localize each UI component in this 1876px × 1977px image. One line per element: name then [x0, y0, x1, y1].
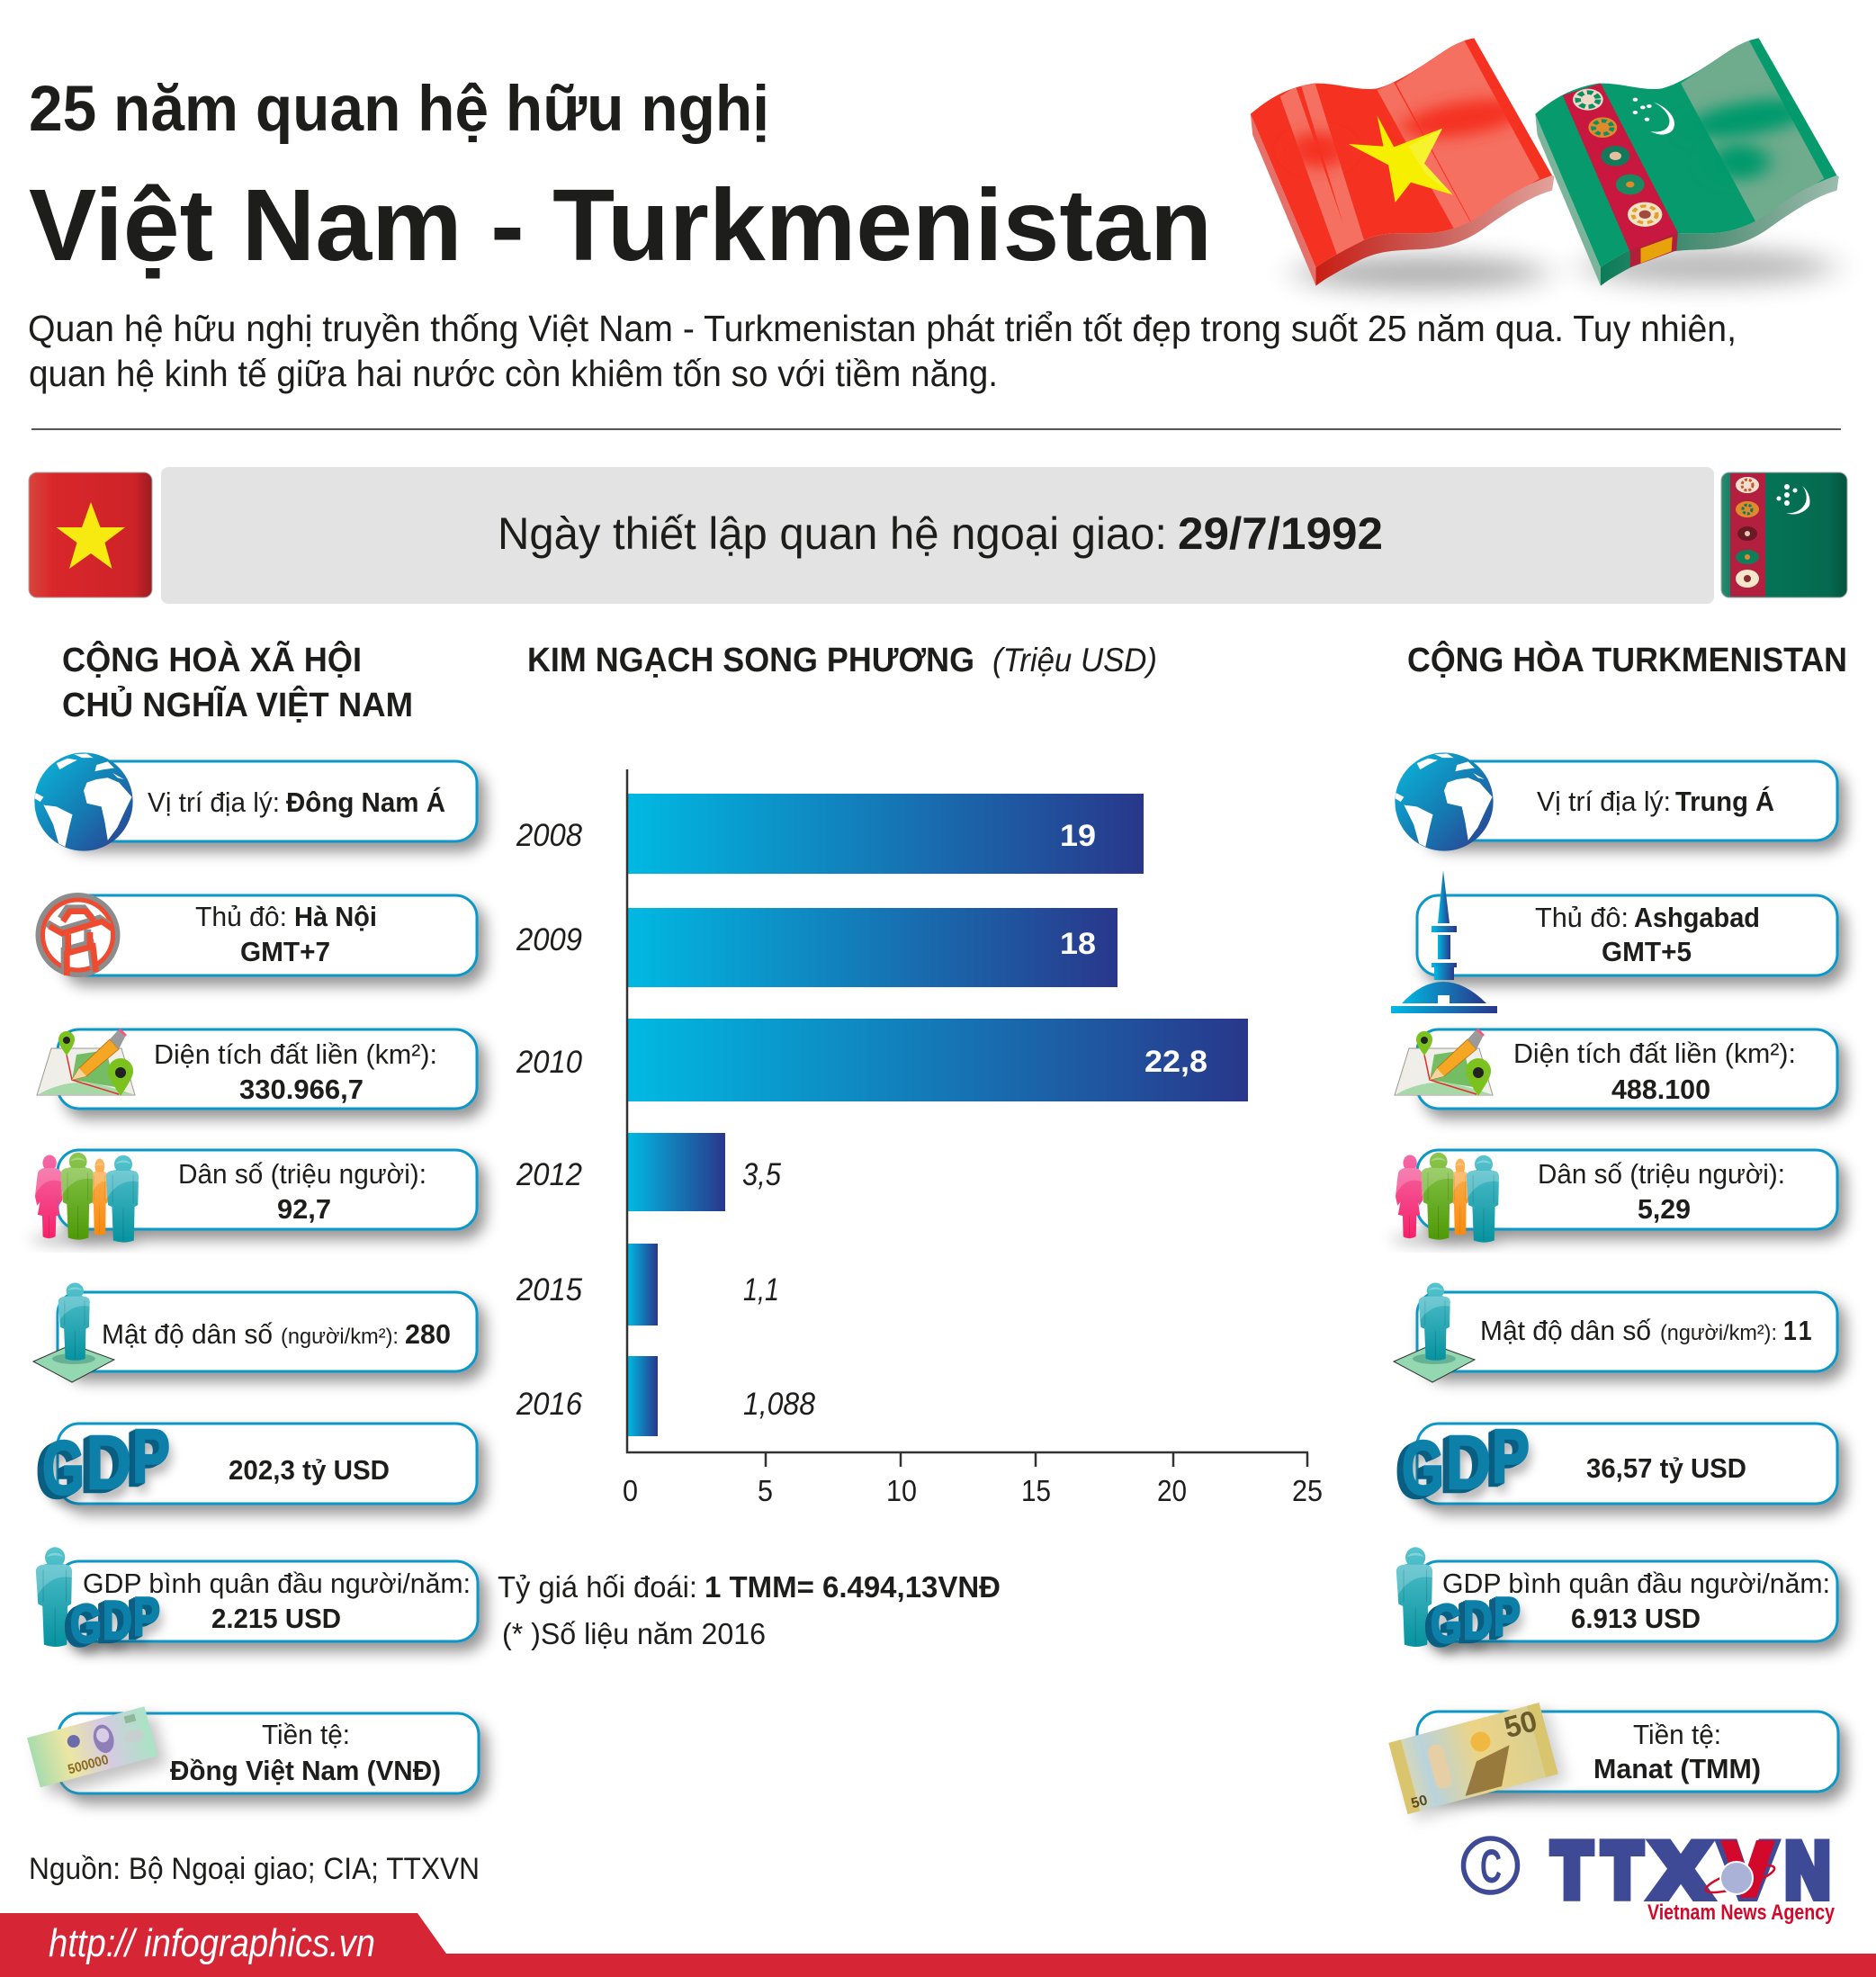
wordmark: T	[1602, 1828, 1642, 1914]
year labels: 2010	[516, 1045, 582, 1080]
heading: Vietnam: CỘNG HOÀ XÃ HỘI	[62, 639, 362, 679]
heading: bilateral trade: KIM NGẠCH SONG PHƯƠNG	[527, 642, 974, 679]
card: capital: GMT+5	[1602, 936, 1692, 967]
icon: Vietnamese banknote: 500000	[67, 1752, 111, 1777]
card: population density	[1417, 1292, 1837, 1371]
heading: bilateral trade: (Triệu USD)	[992, 642, 1157, 678]
icon: map	[1395, 1029, 1493, 1096]
icon: person on land plot	[1394, 1283, 1475, 1382]
card: GDP per capita: GDP bình quân đầu người/năm:	[83, 1568, 471, 1599]
footer band: http:// infographics.vn	[49, 1921, 375, 1965]
icon: person with GDP	[36, 1547, 160, 1654]
notes: exchange rate: Tỷ giá hối đoái:	[498, 1570, 697, 1604]
notes: exchange rate: 1 TMM= 6.494,13VNĐ	[705, 1570, 1001, 1604]
logo: TTXVN	[1463, 1828, 1836, 1925]
heading: Vietnam	[62, 639, 413, 724]
card: location: Vị trí địa lý:	[1537, 786, 1671, 817]
icon: person with GDP: G	[70, 1594, 102, 1654]
card: population density: 280	[405, 1318, 451, 1350]
footer band	[0, 1913, 1876, 1977]
card: land area: Diện tích đất liền (km²):	[1513, 1038, 1796, 1069]
icon: globe	[1395, 752, 1495, 851]
card: GDP	[1417, 1424, 1837, 1504]
intro text: Quan hệ hữu nghị truyền thống Việt Nam - Turkmenistan phát triển tốt đẹp trong suốt 25 năm qua. Tuy nhiên,	[28, 308, 1737, 349]
card: population density: (người/km²):	[281, 1325, 399, 1349]
card: currency	[1417, 1712, 1838, 1792]
card: GDP	[58, 1424, 477, 1504]
card: capital: Ashgabad	[1634, 902, 1760, 933]
icon: minaret tower	[1391, 870, 1497, 1013]
axis labels: 15	[1021, 1474, 1051, 1507]
title	[29, 74, 1212, 282]
icon: person with GDP: D	[1463, 1590, 1493, 1650]
card: population: Dân số (triệu người):	[178, 1158, 426, 1190]
card: population density: Mật độ dân số	[1480, 1315, 1651, 1346]
card: GDP: 202,3 tỷ USD	[229, 1454, 390, 1486]
card: location: Trung Á	[1675, 786, 1774, 817]
icon: GDP lettering: G	[42, 1425, 85, 1510]
icon: GDP lettering: G	[1402, 1425, 1444, 1510]
icon: square flag of Vietnam	[29, 472, 152, 598]
card: GDP per capita: 6.913 USD	[1571, 1603, 1701, 1634]
value labels: 18	[1060, 927, 1096, 961]
card: capital: Thủ đô:	[1535, 902, 1629, 933]
notes: exchange rate: (* )Số liệu năm 2016	[502, 1617, 766, 1650]
wordmark: N	[1785, 1828, 1830, 1914]
panel: Turkmenistan facts	[1388, 752, 1838, 1822]
card: capital: Thủ đô:	[195, 901, 287, 932]
wordmark: V	[1720, 1828, 1775, 1914]
icon: map	[37, 1029, 135, 1096]
icon: GDP lettering: P	[1492, 1414, 1530, 1498]
icon: person on land plot	[33, 1283, 114, 1382]
icon: Vietnamese banknote	[27, 1705, 166, 1798]
value labels: 1,088	[743, 1387, 815, 1422]
title: Việt Nam - Turkmenistan	[29, 168, 1212, 282]
panel: Vietnam facts	[27, 752, 479, 1798]
icon: person with GDP: G	[1431, 1594, 1462, 1654]
value labels: 3,5	[742, 1157, 781, 1192]
card: location	[1417, 761, 1837, 840]
card: population: Dân số (triệu người):	[1538, 1158, 1785, 1190]
year labels: 2008	[516, 818, 582, 853]
card: capital	[58, 895, 477, 975]
icon: person with GDP: D	[103, 1590, 132, 1650]
value labels	[742, 819, 1207, 1422]
card: GDP per capita: GDP bình quân đầu người/năm:	[1442, 1568, 1830, 1599]
card: land area: 330.966,7	[239, 1074, 364, 1105]
card: capital: Hà Nội	[294, 901, 377, 932]
heading: Vietnam: CHỦ NGHĨA VIỆT NAM	[62, 685, 413, 724]
card: capital: GMT+7	[240, 936, 330, 967]
logo: TTXVN: Vietnam News Agency	[1647, 1901, 1836, 1925]
icon: person with GDP: P	[1494, 1586, 1521, 1647]
axes	[626, 769, 1308, 1467]
card: population density: Mật độ dân số	[102, 1318, 273, 1350]
card: location: Vị trí địa lý:	[148, 786, 280, 818]
card: population: 92,7	[277, 1193, 331, 1225]
banner: diplomatic relations date	[161, 467, 1714, 604]
card: GDP: 36,57 tỷ USD	[1586, 1452, 1746, 1484]
card: land area	[1417, 1029, 1837, 1109]
icon: copyright	[1463, 1838, 1517, 1893]
notes: exchange rate	[498, 1570, 1001, 1650]
card: GDP per capita	[58, 1561, 478, 1641]
icon: Turkmen banknote	[1388, 1700, 1566, 1822]
card: currency: Manat (TMM)	[1593, 1753, 1761, 1784]
card: currency	[58, 1713, 479, 1793]
axis labels: 5	[758, 1474, 773, 1507]
banner: diplomatic relations date: Ngày thiết lập quan hệ ngoại giao:	[498, 508, 1167, 559]
icon: Hanoi emblem	[40, 897, 115, 975]
value labels: 22,8	[1144, 1045, 1207, 1079]
year labels	[516, 818, 582, 1422]
icon: GDP lettering: D	[86, 1420, 131, 1505]
icon: waving flags of Vietnam and Turkmenistan	[1251, 38, 1839, 290]
icon: GDP lettering: D	[1446, 1420, 1491, 1505]
intro text	[28, 308, 1737, 394]
icon: copyright: C	[1480, 1840, 1502, 1893]
card: population	[1417, 1150, 1837, 1229]
wordmark	[1552, 1828, 1830, 1914]
card: land area: Diện tích đất liền (km²):	[154, 1038, 437, 1070]
heading: Turkmenistan: CỘNG HÒA TURKMENISTAN	[1407, 639, 1847, 679]
axis labels: 25	[1292, 1474, 1323, 1507]
icon: people	[31, 1153, 142, 1244]
banner: diplomatic relations date: 29/7/1992	[1178, 508, 1383, 559]
card: population density: (người/km²):	[1660, 1321, 1777, 1345]
axis labels	[623, 1474, 1323, 1507]
wordmark: X	[1652, 1828, 1710, 1914]
icon: people	[1391, 1153, 1503, 1244]
card: currency: Tiền tệ:	[1633, 1719, 1721, 1750]
axis labels: 20	[1157, 1474, 1187, 1507]
card: location	[58, 761, 477, 841]
icon: GDP lettering	[42, 1414, 170, 1510]
axis labels: 10	[886, 1474, 917, 1507]
title: 25 năm quan hệ hữu nghị	[29, 74, 769, 145]
icon: person with GDP: P	[133, 1586, 160, 1647]
icon: person with GDP	[1396, 1547, 1521, 1654]
bars	[628, 794, 1248, 1436]
icon: Turkmen banknote: 50	[1501, 1703, 1540, 1744]
card: population density	[58, 1292, 477, 1371]
card: population density: 11	[1783, 1315, 1815, 1346]
card: land area	[58, 1029, 477, 1109]
card: land area: 488.100	[1611, 1074, 1710, 1105]
card: capital	[1417, 895, 1837, 975]
value labels: 1,1	[743, 1272, 779, 1308]
intro text: quan hệ kinh tế giữa hai nước còn khiêm tốn so với tiềm năng.	[29, 353, 998, 394]
year labels: 2015	[516, 1272, 582, 1308]
icon: GDP lettering	[1402, 1414, 1530, 1510]
card: population	[58, 1150, 477, 1229]
card: GDP per capita	[1417, 1561, 1837, 1641]
icon: Turkmen banknote: 50	[1410, 1793, 1430, 1811]
card: population: 5,29	[1638, 1193, 1691, 1225]
card: GDP per capita: 2.215 USD	[211, 1603, 341, 1634]
icon: globe	[34, 752, 134, 851]
source: Nguồn: Bộ Ngoại giao; CIA; TTXVN	[29, 1852, 480, 1886]
year labels: 2012	[516, 1157, 582, 1192]
icon: square flag of Turkmenistan	[1721, 472, 1847, 598]
wordmark: T	[1552, 1828, 1592, 1914]
bar chart: bilateral trade	[516, 769, 1323, 1507]
year labels: 2009	[516, 922, 582, 957]
card: currency: Tiền tệ:	[262, 1719, 350, 1750]
flag: Vietnam	[1251, 38, 1554, 286]
card: currency: Đồng Việt Nam (VNĐ)	[170, 1755, 441, 1786]
axis labels: 0	[623, 1474, 638, 1507]
icon: GDP lettering: P	[132, 1414, 170, 1498]
value labels: 19	[1060, 819, 1096, 853]
year labels: 2016	[516, 1387, 582, 1422]
card: location: Đông Nam Á	[286, 786, 445, 818]
flag: Turkmenistan	[1535, 38, 1839, 286]
